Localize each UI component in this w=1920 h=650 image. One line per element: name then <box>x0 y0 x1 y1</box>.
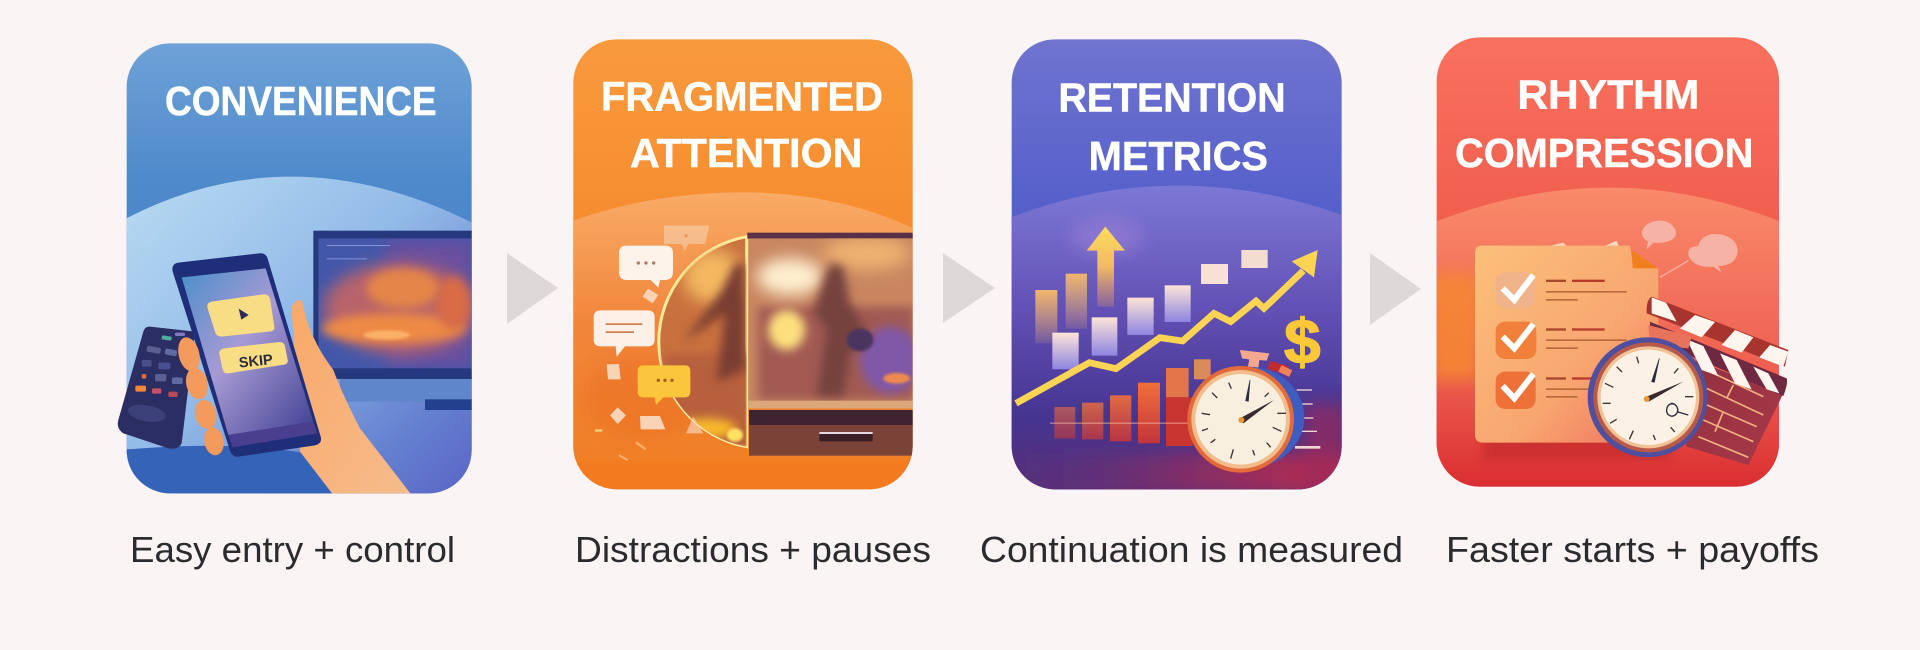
remote buttons <box>126 333 185 425</box>
card background <box>1437 37 1779 487</box>
phone chin <box>228 422 317 447</box>
tick marks <box>1603 357 1693 440</box>
lighter dome backdrop <box>120 177 477 500</box>
document tabs <box>1547 241 1620 250</box>
panel: rhythm compression <box>1430 37 1788 493</box>
lighter dome backdrop <box>1430 188 1787 493</box>
card background <box>1012 39 1342 489</box>
caption: rhythm compression: Faster starts + payoffs <box>1446 529 1819 570</box>
clock <box>1588 325 1708 457</box>
arrow 3 <box>1370 253 1421 325</box>
dial <box>1195 374 1286 465</box>
lower bar chart <box>1050 359 1211 446</box>
document fold <box>1632 250 1658 268</box>
case <box>1187 366 1294 473</box>
stopwatch <box>1187 350 1304 473</box>
play button <box>207 294 274 337</box>
speed lines <box>1295 389 1320 449</box>
rising trend arrow <box>1016 250 1318 403</box>
speech bubbles <box>1642 221 1738 277</box>
clapper body <box>1667 350 1783 465</box>
speech bubble: yellow <box>638 365 690 405</box>
card scene <box>567 192 920 460</box>
title: fragmented attention: FRAGMENTED <box>601 74 883 120</box>
list lines <box>1546 280 1627 398</box>
lighter dome backdrop <box>1007 186 1347 493</box>
title: retention metrics: RETENTION <box>1058 74 1286 120</box>
caption: retention metrics: Continuation is measured <box>980 529 1403 570</box>
clapperboard <box>1647 297 1788 465</box>
case <box>1588 337 1708 457</box>
crown <box>1240 350 1269 370</box>
checkbox 1 <box>1496 272 1535 308</box>
phone screen <box>182 268 313 435</box>
upper bar chart <box>1035 227 1268 369</box>
tv slot <box>819 432 873 441</box>
arrow 2 <box>943 253 995 323</box>
title: fragmented attention <box>601 74 883 176</box>
title: rhythm compression: COMPRESSION <box>1455 130 1753 176</box>
crimson floor glow <box>1078 444 1342 490</box>
upper stick <box>1647 297 1788 367</box>
card background <box>127 43 472 493</box>
panel: convenience <box>118 43 477 500</box>
tick marks <box>1202 383 1286 459</box>
speech bubble: dots <box>619 246 673 288</box>
caption: fragmented attention: Distractions + pauses <box>575 529 931 570</box>
skip label: SKIP <box>238 352 274 372</box>
title: rhythm compression: RHYTHM <box>1517 72 1699 118</box>
tv frame top <box>747 233 914 239</box>
tv screen <box>318 238 477 368</box>
forearm and palm <box>292 300 412 495</box>
title: fragmented attention: ATTENTION <box>630 130 862 176</box>
play glyph <box>239 309 249 320</box>
panel: fragmented attention <box>567 39 920 489</box>
dial <box>1601 350 1696 445</box>
document shadow <box>1482 442 1671 461</box>
tv base <box>749 410 914 426</box>
left orange glow <box>1436 266 1475 386</box>
tv screen <box>748 237 920 410</box>
clock hands <box>1246 380 1250 401</box>
title: convenience: CONVENIENCE <box>165 78 437 124</box>
remote control <box>118 327 195 449</box>
document page <box>1475 246 1658 443</box>
clapper lines <box>1698 373 1763 457</box>
television <box>313 231 477 410</box>
dollar sign: $ <box>1284 307 1321 377</box>
arrow 1 <box>507 253 558 324</box>
faded speech bubble <box>664 226 709 251</box>
case back <box>1192 367 1304 468</box>
table shadow <box>126 446 400 494</box>
floating fragments <box>595 289 703 461</box>
tv lower bar <box>749 425 914 456</box>
caption: convenience: Easy entry + control <box>130 529 455 570</box>
checkbox 2 <box>1496 322 1536 359</box>
right crimson glow <box>1303 403 1347 490</box>
card scene <box>1007 186 1347 493</box>
card background <box>573 39 913 489</box>
panel: retention metrics <box>1007 39 1347 493</box>
purple glow <box>1070 217 1143 257</box>
card scene <box>120 177 477 500</box>
lighter dome backdrop <box>567 192 920 460</box>
half circle picture <box>659 237 750 450</box>
checklist document <box>1475 241 1658 443</box>
clock hands <box>1652 358 1659 382</box>
card scene <box>1430 188 1787 493</box>
phone body <box>172 253 321 457</box>
title: retention metrics: METRICS <box>1089 133 1268 179</box>
crown <box>1648 325 1692 348</box>
scribble mark <box>1667 403 1688 416</box>
tv foot <box>425 399 473 410</box>
fingers <box>175 335 226 457</box>
skip button <box>219 342 288 373</box>
title: rhythm compression <box>1455 72 1753 176</box>
up arrow <box>1087 227 1125 307</box>
checkbox 3 <box>1496 372 1536 409</box>
lower stick <box>1650 322 1787 396</box>
tv stand <box>340 377 473 402</box>
smartphone <box>172 253 321 457</box>
title: retention metrics <box>1058 74 1286 179</box>
speech bubble: lines <box>594 310 655 357</box>
warm glow <box>592 363 684 428</box>
tv frame <box>313 231 473 379</box>
